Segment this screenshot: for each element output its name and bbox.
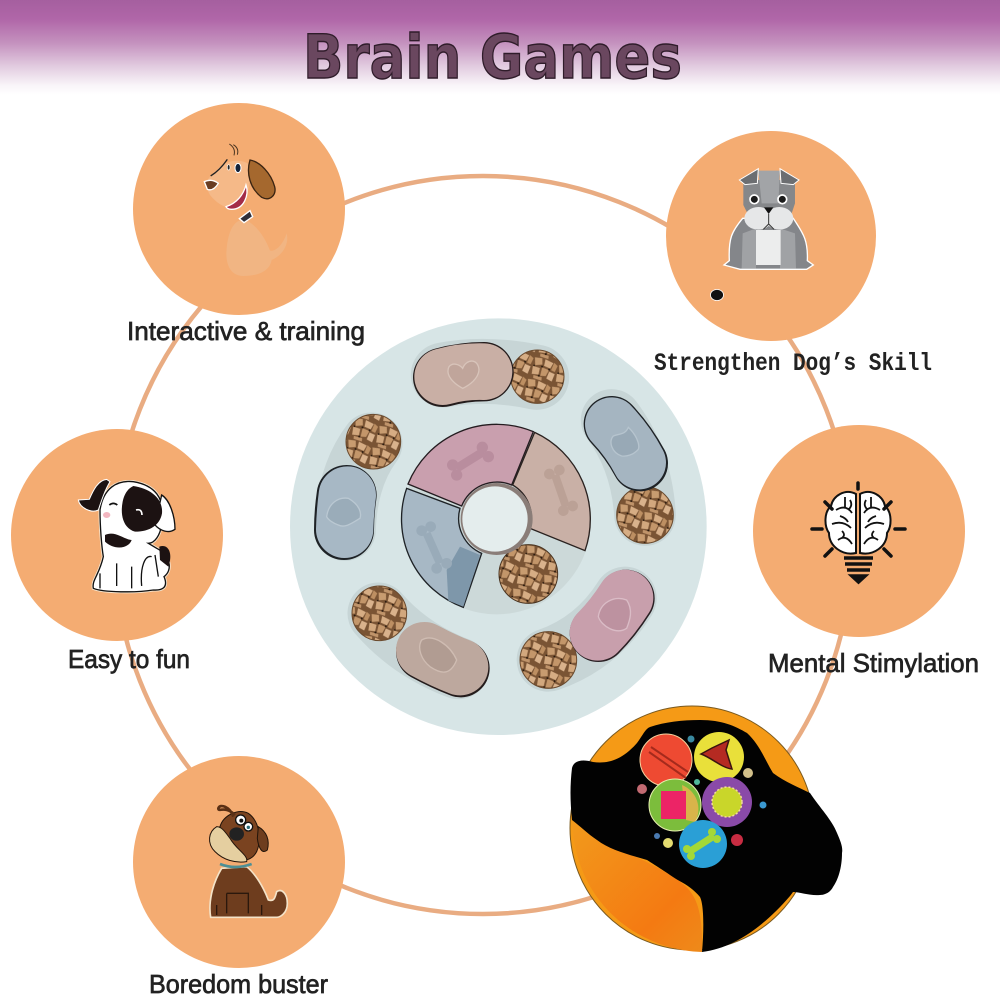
brain lobes <box>825 492 856 554</box>
icon: black and white puppy <box>78 479 175 592</box>
circle: easy to fun <box>11 429 223 641</box>
centre hub <box>461 483 533 555</box>
label: strengthen dog's skill: Strengthen Dog’s Skill <box>654 349 932 378</box>
sliding cover: blue left <box>344 495 347 530</box>
toy bubble: green with pink box <box>649 779 701 831</box>
toy bubble: purple with tennis ball <box>702 777 752 827</box>
title: Brain Games <box>303 22 682 93</box>
icon: black dog silhouette <box>570 720 842 952</box>
bone: tan <box>544 465 578 516</box>
icon: small black spot <box>710 290 724 300</box>
sliding cover: tan top <box>443 372 484 377</box>
circle: boredom buster <box>133 756 345 968</box>
toy bubble: yellow with steak <box>694 732 744 782</box>
icon: grey schnauzer <box>724 169 813 269</box>
wheel sector: tan <box>513 432 590 551</box>
heart: top right <box>611 427 639 456</box>
icon: brain light bulb <box>812 483 905 582</box>
feeder base <box>290 318 707 735</box>
photo circle: orange background <box>570 706 814 950</box>
sliding cover: tan bottom <box>424 650 461 668</box>
label: mental stimylation: Mental Stimylation <box>768 648 979 678</box>
toy bubble: blue with bone <box>679 820 727 868</box>
heart: left <box>327 498 361 526</box>
label: interactive and training: Interactive & training <box>127 316 365 346</box>
panel: interactive and training <box>127 103 365 346</box>
kibble wells <box>346 350 673 688</box>
panel: strengthen dog's skill <box>654 131 932 378</box>
sliding cover: blue top right <box>612 424 640 463</box>
circle: skill <box>666 131 876 341</box>
label: easy to fun: Easy to fun <box>68 644 190 674</box>
bone: pink <box>447 442 494 481</box>
small dots <box>637 736 766 848</box>
connecting orbit ring <box>114 176 852 914</box>
bone: blue <box>416 521 452 574</box>
heart: top <box>448 361 479 388</box>
circle: mental stimulation <box>753 425 965 637</box>
icon: tan dog with brown ear <box>204 144 287 276</box>
panel: dog silhouette with toys in head <box>570 706 842 952</box>
header gradient band <box>0 0 1000 95</box>
bulb base <box>844 558 873 582</box>
label: boredom buster: Boredom buster <box>149 969 328 999</box>
wheel sector: pink <box>408 424 533 506</box>
outer channels <box>345 371 645 668</box>
circle: interactive <box>133 103 345 315</box>
sliding cover: pink bottom right <box>598 598 626 633</box>
panel: boredom buster <box>133 756 345 999</box>
kibble well: centre <box>499 545 558 603</box>
light rays <box>812 483 905 556</box>
toy bubble: red with stick <box>640 734 692 786</box>
darker slid shadow on blue sector <box>447 547 480 607</box>
heart: bottom <box>420 638 457 672</box>
wheel sector: blue <box>402 488 482 607</box>
hub cap <box>462 486 528 552</box>
panel: puzzle feeder disc <box>290 318 707 735</box>
panel: mental stimulation <box>753 425 979 678</box>
centre wheel base <box>402 426 591 614</box>
lower fur gradient <box>572 820 702 952</box>
icon: brown dog with big nose <box>210 806 287 917</box>
panel: easy to fun <box>11 429 223 674</box>
heart: bottom right <box>598 599 631 631</box>
